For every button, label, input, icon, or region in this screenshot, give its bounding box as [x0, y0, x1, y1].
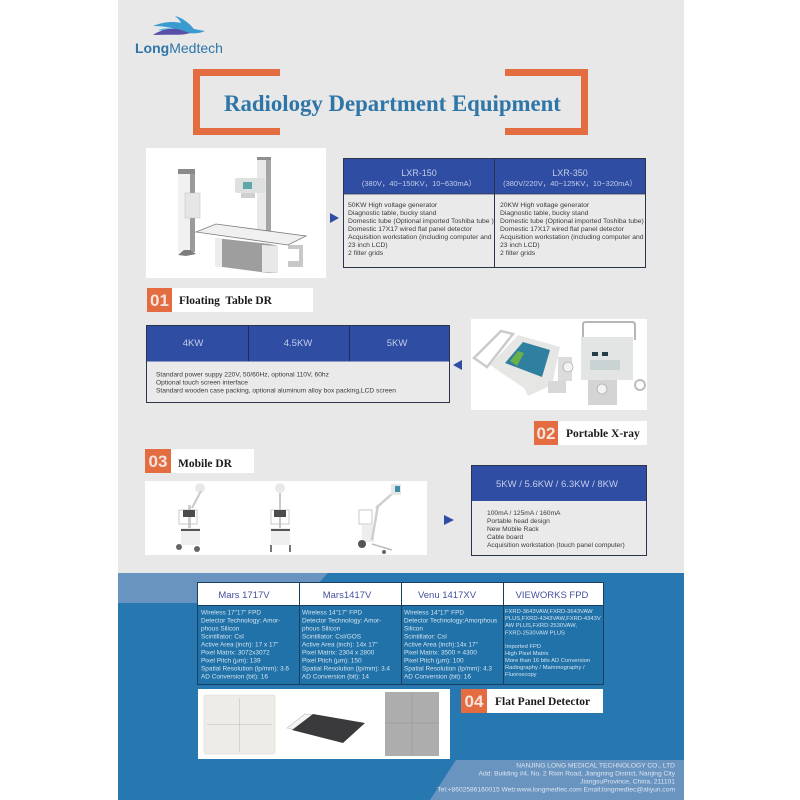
VIEWORKS FPD column: Fluoroscopy [505, 672, 537, 678]
label 02: 02 [537, 424, 555, 443]
panel: flat panel detector photo [198, 689, 450, 759]
label 02: Portable X-ray [566, 428, 640, 440]
Mars1417V column: Active Area (inch): 14x 17" [302, 642, 378, 648]
footer contact strip: Tel:+8602586160015 Web:www.longmedtec.com Email:longmedtec@aliyun.com [437, 786, 675, 794]
LXR-150 column: Domestic tube (Optional imported Toshiba tube ) [348, 218, 494, 225]
label 01: 01 [150, 291, 169, 310]
icon: logo bird [153, 16, 205, 35]
Venu 1417XV column: Pixel Pitch (μm): 100 [404, 658, 464, 664]
detector black [287, 714, 365, 743]
table: portable X-ray: Standard wooden case packing, optional aluminum alloy box packing,LCD screen [156, 388, 396, 394]
LXR-350 column: LXR-350 [552, 168, 588, 178]
panel: floating table DR photo [146, 148, 326, 278]
VIEWORKS FPD column: PLUS,FXRD-4343VAW,FXRD-4343V [505, 616, 601, 622]
LXR-150 column: (380V，40~150KV，10~630mA） [362, 179, 476, 188]
Mars 1717V column: Detector Technology: Amor- [201, 618, 280, 624]
label 01: Floating Table DR [179, 295, 273, 307]
label 04: Flat Panel Detector [495, 696, 590, 708]
VIEWORKS FPD column: AW PLUS,FXRD-2530VAW, [505, 623, 577, 629]
Mars1417V column: Wireless 14"17" FPD [302, 610, 362, 616]
Mars 1717V column: Pixel Matrix: 3072x3072 [201, 650, 270, 656]
Venu 1417XV column: Venu 1417XV [418, 590, 477, 601]
label 04: 04 [465, 692, 484, 711]
Mars 1717V column: Mars 1717V [218, 590, 270, 601]
panel: mobile DR photo [145, 481, 427, 555]
Mars1417V column [302, 590, 390, 680]
LXR-150 column: LXR-150 [401, 168, 437, 178]
Venu 1417XV column: Wireless 14"17" FPD [404, 610, 464, 616]
label 03: 03 [149, 452, 167, 471]
VIEWORKS FPD column: More than 16 bits AD Conversion [505, 658, 590, 664]
table [196, 157, 306, 273]
footer contact strip: NANJING LONG MEDICAL TECHNOLOGY CO., LTD [516, 762, 675, 770]
blue footer band [118, 573, 684, 800]
table: mobile DR: New Mobile Rack [487, 526, 539, 533]
table: mobile DR: 100mA / 125mA / 160mA [487, 510, 561, 517]
Mars 1717V column: AD Conversion (bit): 16 [201, 674, 268, 680]
footer contact strip [430, 760, 684, 800]
table: flat panel detectors [197, 582, 604, 684]
label 01 [147, 288, 313, 312]
LXR-150 column: Domestic 17X17 wired flat panel detector [348, 226, 473, 233]
LXR-350 column [500, 168, 644, 257]
Mars 1717V column: Active Area (inch): 17 x 17" [201, 642, 279, 648]
Mars1417V column: AD Conversion (bit): 14 [302, 674, 369, 680]
table: mobile DR: Acquisition workstation (touch panel computer) [487, 542, 625, 549]
title: Radiology Department Equipment [224, 91, 561, 116]
Venu 1417XV column: Active Area (inch):14x 17" [404, 642, 479, 648]
title frame [193, 69, 588, 135]
Mars1417V column: Pixel Matrix: 2304 x 2800 [302, 650, 375, 656]
Mars 1717V column: phous Silicon [201, 626, 240, 632]
detector white [204, 695, 275, 754]
panel: portable X-ray photo [471, 319, 647, 410]
Mars1417V column: Spatial Resolution (lp/mm): 3.4 [302, 666, 390, 672]
label 03: Mobile DR [178, 458, 233, 470]
VIEWORKS FPD column: Imported FPD [505, 644, 541, 650]
LXR-350 column: (380V/220V，40~125KV，10~320mA） [503, 179, 637, 188]
LXR-150 column: Acquisition workstation (including computer and [348, 234, 492, 241]
arrow right [444, 515, 454, 525]
table: mobile DR: 5KW / 5.6KW / 6.3KW / 8KW [496, 479, 618, 490]
right unit [581, 322, 645, 405]
Venu 1417XV column: AD Conversion (bit): 16 [404, 674, 471, 680]
Venu 1417XV column: Scintillator: CsI [404, 634, 447, 640]
footer contact strip: JiangsuProvince, China. 211101 [580, 778, 675, 786]
LXR-150 column: 2 filter grids [348, 250, 384, 257]
Mars1417V column: phous Silicon [302, 626, 341, 632]
Mars1417V column: Detector Technology: Amor- [302, 618, 381, 624]
logo text: LongMedtech [135, 40, 223, 56]
Mars 1717V column: Spatial Resolution (lp/mm): 3.6 [201, 666, 289, 672]
table: mobile DR: Cable board [487, 534, 523, 541]
Venu 1417XV column: Silicon [404, 626, 423, 632]
LXR-350 column: 2 filter grids [500, 250, 536, 257]
LXR-350 column: Domestic 17X17 wired flat panel detector [500, 226, 625, 233]
mobile unit front [270, 483, 291, 552]
table: portable X-ray: 4KW [183, 338, 203, 349]
Venu 1417XV column: Pixel Matrix: 3500 × 4300 [404, 650, 477, 656]
VIEWORKS FPD column: Radiography / Mammography / [505, 665, 585, 671]
Venu 1417XV column [404, 590, 497, 680]
label 02 [534, 421, 647, 445]
arrow right [330, 213, 339, 223]
Mars 1717V column: Pixel Pitch (μm): 139 [201, 658, 261, 664]
LXR-350 column: Diagnostic table, bucky stand [500, 210, 589, 217]
left unit [474, 331, 573, 396]
LXR-350 column: 20KW High voltage generator [500, 202, 590, 209]
table: portable X-ray: 4.5KW [284, 338, 312, 349]
Venu 1417XV column: Detector Technology:Amorphous [404, 618, 497, 624]
VIEWORKS FPD column: FXRD-2530VAW PLUS [505, 630, 565, 636]
LXR-350 column: Acquisition workstation (including computer and [500, 234, 644, 241]
logo [135, 16, 223, 56]
VIEWORKS FPD column: High Pixel Matrix [505, 651, 549, 657]
table: mobile DR [472, 466, 646, 556]
label 04 [461, 689, 603, 713]
Mars 1717V column [201, 590, 289, 680]
table: portable X-ray: 5KW [387, 338, 407, 349]
table: portable X-ray: Optional touch screen interface [156, 380, 248, 386]
footer contact strip: Add: Building #4, No. 2 Rixin Road, Jiangning District, Nanjing City [479, 770, 676, 778]
Mars 1717V column: Scintillator: CsI [201, 634, 244, 640]
LXR-150 column: Diagnostic table, bucky stand [348, 210, 437, 217]
table: mobile DR: Portable head design [487, 518, 550, 525]
Mars1417V column: Scintillator: CsI/GOS [302, 634, 361, 640]
LXR-150 column: 23 inch LCD) [348, 242, 388, 249]
Mars 1717V column: Wireless 17"17" FPD [201, 610, 261, 616]
page background panel [118, 0, 684, 573]
mobile unit front-left [176, 483, 205, 552]
VIEWORKS FPD column: VIEWORKS FPD [516, 590, 589, 601]
LXR-350 column: Domestic tube (Optional imported Toshiba tube) [500, 218, 644, 225]
mobile unit side [358, 484, 401, 554]
arrow left [453, 360, 462, 370]
VIEWORKS FPD column [505, 590, 601, 678]
label 03 [145, 449, 254, 473]
LXR-150 column [348, 168, 494, 257]
VIEWORKS FPD column: FXRD-3643VAW,FXRD-3643VAW [505, 609, 593, 615]
LXR-350 column: 23 inch LCD) [500, 242, 540, 249]
wall stand [178, 169, 200, 256]
table: portable X-ray [146, 326, 450, 402]
Mars1417V column: Pixel Pitch (μm): 150 [302, 658, 362, 664]
LXR-150 column: 50KW High voltage generator [348, 202, 438, 209]
Venu 1417XV column: Spatial Resolution (lp/mm): 4.3 [404, 666, 492, 672]
table: LXR models [344, 158, 646, 268]
table: portable X-ray: Standard power suppy 220V, 50/60Hz, optional 110V, 60hz [156, 372, 329, 378]
detector gray [385, 692, 439, 756]
Mars1417V column: Mars1417V [323, 590, 372, 601]
